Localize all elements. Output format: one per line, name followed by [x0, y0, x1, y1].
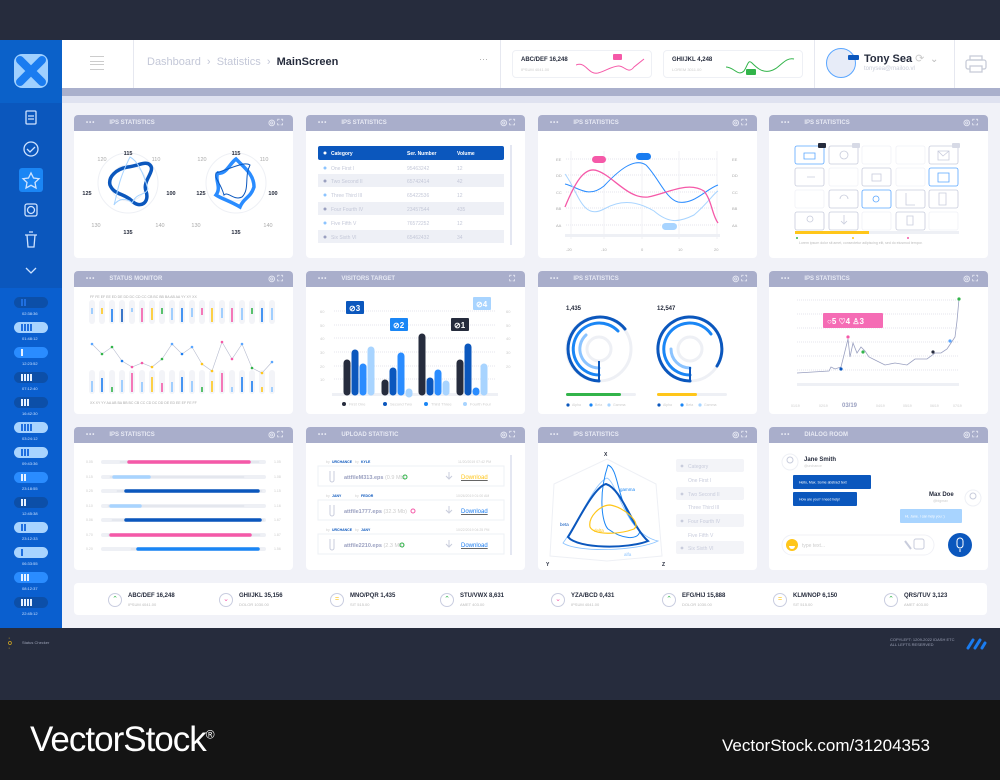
breadcrumb: Dashboard › Statistics › MainScreen [147, 56, 338, 68]
panel: triangle radar: delta [594, 528, 604, 533]
ticker bar [74, 583, 987, 615]
footer [0, 628, 1000, 700]
panel: radar charts: 140 [263, 223, 273, 229]
ticker bar: SIT 515.00 [793, 602, 812, 607]
panel: visitors target: First One [349, 402, 366, 406]
panel: category table: 12 [457, 193, 463, 199]
panel: horizontal bars [74, 427, 293, 570]
header bar: ··· [479, 54, 488, 64]
panel: dialog room: How are you? I need help! [799, 498, 840, 502]
panel: category table: Ser. Number [407, 151, 437, 157]
panel: radar charts: 120 [97, 157, 107, 163]
status timers: 03:24:12 [22, 436, 38, 441]
ticker bar: IPSUM 4041.00 [128, 602, 156, 607]
panel: status monitor: ••• STATUS MONITOR [86, 276, 162, 282]
panel: icon grid: ••• IPS STATISTICS [781, 120, 850, 126]
panel: upload statistic: 10/22/2019 04:25 PM [456, 528, 490, 532]
panel: horizontal bars: 0.15 [86, 475, 93, 479]
panel: icon grid: Lorem ipsum dolor sit amet, consectetur adipiscing elit, sed do eiusmod tempor. [799, 241, 923, 245]
panel: line chart: AA [732, 223, 738, 228]
panel: visitors target: Fourth Four [470, 402, 492, 406]
panel: line chart: EE [732, 157, 738, 162]
panel: status monitor [74, 271, 293, 414]
panel: donut gauges: Alpha [663, 403, 672, 407]
panel: line chart [538, 115, 757, 258]
header bar [62, 40, 1000, 88]
panel: upload statistic: by [355, 528, 359, 532]
panel: line chart: 0 [641, 247, 644, 252]
panel: visitors target: 60 [320, 309, 325, 314]
status timers: 16:42:30 [22, 411, 38, 416]
panel: line chart: ••• IPS STATISTICS [550, 120, 619, 126]
panel: category table: 42 [457, 179, 463, 185]
panel: triangle radar [538, 427, 757, 570]
panel: status monitor: XX XY YY AA AB BA BB BC CB CC CD DC DD DE ED EE EF FE FF [90, 401, 197, 405]
panel: triangle radar: alfa [624, 552, 632, 557]
panel: radar charts: 130 [91, 223, 101, 229]
status timers: 09:43:36 [22, 461, 38, 466]
panel: horizontal bars: 1.15 [274, 489, 281, 493]
panel: horizontal bars: 1.05 [274, 460, 281, 464]
panel: upload statistic: 10/26/2019 01:00 AM [456, 494, 489, 498]
panel: radar charts: ◎ ⛶ [268, 118, 283, 127]
panel: triangle radar: beta [560, 522, 569, 527]
profile: tonysea@mailoo.vl [864, 66, 915, 72]
panel: visitors target: ⊘1 [454, 321, 466, 330]
panel: visitors target [306, 271, 525, 414]
panel: upload statistic: JANY [361, 528, 371, 532]
panel: visitors target: ⊘4 [476, 300, 488, 309]
panel: line chart: ◎ ⛶ [732, 118, 747, 127]
ticker bar: ⌃ [666, 596, 672, 603]
panel: triangle radar: Four Fourth IV [688, 519, 721, 525]
panel: upload statistic: by [355, 494, 359, 498]
panel: triangle radar: ••• IPS STATISTICS [550, 432, 619, 438]
panel: triangle radar: One First I [688, 478, 711, 484]
panel: category table: 95463242 [407, 166, 429, 172]
watermark band: VectorStock® [30, 720, 214, 759]
panel: category table: Category [331, 151, 353, 157]
panel: visitors target: 50 [320, 323, 325, 328]
panel: upload statistic: URCHANCE [332, 460, 353, 464]
panel: radar charts: 135 [123, 230, 133, 236]
status timers: 08:12:37 [22, 586, 38, 591]
panel: dialog room: type text... [802, 543, 825, 549]
panel: category table: Two Second II [331, 179, 363, 185]
panel: donut gauges: Gamma [704, 403, 716, 407]
panel: upload statistic: attfileM313.eps (0.9 Mb) [344, 475, 406, 481]
panel: stock line: 02/19 [819, 404, 828, 408]
panel: stock line: ◎ ⛶ [963, 274, 978, 283]
panel: stock line: 06/19 [930, 404, 939, 408]
panel: horizontal bars: ••• IPS STATISTICS [86, 432, 155, 438]
ticker bar: MNO/PQR 1,435 [350, 593, 395, 599]
panel: triangle radar: Six Sixth VI [688, 546, 714, 552]
panel: dialog room: ◎ ⛶ [963, 430, 978, 439]
panel: status monitor: FF FE EF EE ED DE DD DC CD CC CB BC BB BA AB AA YY XY XX [90, 295, 197, 299]
panel: upload statistic: Download [461, 543, 488, 549]
panel: upload statistic [306, 427, 525, 570]
panel: visitors target: 40 [320, 336, 325, 341]
panel: category table: 435 [457, 207, 466, 213]
panel: horizontal bars: 1.87 [274, 533, 281, 537]
panel: donut gauges: Beta [686, 403, 693, 407]
footer: ALL LEFTS RESERVED [890, 642, 934, 647]
ticker bar: EFG/HIJ 15,888 [682, 593, 725, 599]
panel: visitors target: 40 [506, 336, 511, 341]
panel: line chart: AA [556, 223, 562, 228]
panel: dialog room [769, 427, 988, 570]
panel: donut gauges: 12,547 [657, 306, 676, 312]
panel: upload statistic: by [326, 494, 330, 498]
ticker card ABC: IPSUM 4041.00 [521, 67, 549, 72]
panel: donut gauges: ◎ ⛶ [732, 274, 747, 283]
ticker card GHI: GHI/JKL 4,248 [672, 57, 712, 63]
panel: dialog room: @bigmax [933, 499, 948, 503]
footer: Status Checker [22, 640, 49, 645]
panel: horizontal bars: 0.10 [86, 504, 93, 508]
ticker bar: ⌃ [112, 596, 118, 603]
panel: category table: 12 [457, 221, 463, 227]
panel: radar charts: 100 [268, 191, 278, 197]
panel: horizontal bars: 1.56 [274, 547, 281, 551]
panel: donut gauges: Alpha [572, 403, 581, 407]
ticker bar: YZA/BCD 0,431 [571, 593, 614, 599]
panel: visitors target: ⊘3 [349, 304, 361, 313]
panel: visitors target: Second Two [390, 402, 413, 406]
panel: category table: Six Sixth VI [331, 235, 357, 241]
panel: visitors target: ⊘2 [393, 321, 405, 330]
panel: radar charts: 115 [124, 151, 132, 157]
ticker bar: SIT 515.00 [350, 602, 370, 607]
panel: category table: 12 [457, 166, 463, 172]
profile [826, 48, 938, 78]
panel: category table: Four Fourth IV [331, 207, 364, 213]
panel: stock line: 01/19 [791, 404, 800, 408]
panel: line chart: EE [556, 157, 562, 162]
sidebar [0, 40, 62, 628]
panel: line chart: 20 [714, 247, 719, 252]
menu icon [90, 56, 104, 70]
watermark band: VectorStock.com/31204353 [722, 736, 930, 755]
panel: donut gauges: Beta [595, 403, 602, 407]
panel: upload statistic: ••• UPLOAD STATISTIC [318, 432, 398, 438]
panel: line chart: CC [732, 190, 738, 195]
ticker bar: QRS/TUV 3,123 [904, 593, 947, 599]
panel: visitors target: ••• VISITORS TARGET [318, 276, 395, 282]
panel: line chart: BB [556, 206, 562, 211]
panel: radar charts: 115 [232, 151, 240, 157]
ticker bar: ⌄ [223, 596, 229, 603]
panel: stock line: 03/19 [842, 403, 858, 409]
panel: category table [306, 115, 525, 258]
panel: horizontal bars: ◎ ⛶ [268, 430, 283, 439]
panel: category table: 65422536 [407, 193, 429, 199]
panel: upload statistic: Download [461, 509, 488, 515]
ticker bar: DOLOR 1030.00 [682, 602, 712, 607]
panel: category table: Three Third III [331, 193, 362, 199]
panel: triangle radar: gamma [620, 487, 636, 492]
content background [62, 88, 1000, 96]
top dark band [0, 0, 1000, 40]
panel: upload statistic: URCHANCE [332, 528, 353, 532]
panel: upload statistic: KYLE [361, 460, 371, 464]
ticker bar: KLM/NOP 6,150 [793, 593, 837, 599]
panel: donut gauges [538, 271, 757, 414]
profile: Tony Sea ⟳ [864, 53, 924, 65]
panel: dialog room: @urchance [804, 464, 822, 468]
panel: radar charts: 125 [82, 191, 92, 197]
panel: dialog room: ••• DIALOG ROOM [781, 432, 848, 438]
panel: radar charts: 135 [231, 230, 241, 236]
panel: stock line: 05/19 [903, 404, 912, 408]
panel: triangle radar: Category [688, 464, 709, 470]
panel: radar charts: 130 [191, 223, 201, 229]
ticker bar: = [778, 596, 782, 603]
ticker bar: ⌃ [444, 596, 450, 603]
ticker bar: GHI/JKL 35,156 [239, 593, 283, 599]
logo [0, 40, 62, 103]
panel: visitors target: 50 [506, 323, 511, 328]
panel: upload statistic: FEDOR [361, 494, 374, 498]
panel: visitors target: 60 [506, 309, 511, 314]
panel: status monitor: ◎ ⛶ [268, 274, 283, 283]
panel: triangle radar: X [604, 452, 608, 458]
profile: ⌄ [930, 54, 938, 65]
panel: icon grid [769, 115, 988, 258]
panel: icon grid: ◎ ⛶ [963, 118, 978, 127]
panel: visitors target: 30 [320, 350, 325, 355]
status timers: 12:45:38 [22, 511, 38, 516]
panel: donut gauges: ••• IPS STATISTICS [550, 276, 619, 282]
panel: horizontal bars: 0.25 [86, 489, 93, 493]
ticker card GHI [663, 50, 803, 78]
panel: radar charts: 120 [197, 157, 207, 163]
panel: triangle radar: Two Second II [688, 492, 720, 498]
panel: dialog room: Hi, Jane. I can help you :) [905, 514, 945, 518]
ticker bar: STU/VWX 8,631 [460, 593, 504, 599]
panel: category table: Five Fifth V [331, 221, 357, 227]
ticker bar: ⌃ [888, 596, 894, 603]
panel: category table: 76572252 [407, 221, 429, 227]
panel: line chart: DD [732, 173, 738, 178]
panel: horizontal bars: 0.20 [86, 547, 93, 551]
panel: visitors target: Third Three [431, 402, 452, 406]
panel: stock line: 07/19 [953, 404, 962, 408]
status timers: 07:12:40 [22, 386, 38, 391]
panel: stock line: ○5 ♡4 ♙3 [827, 317, 865, 326]
panel: triangle radar: Y [546, 562, 550, 568]
panel: stock line: ••• IPS STATISTICS [781, 276, 850, 282]
panel: line chart: DD [556, 173, 562, 178]
panel: dialog room: Hello, Max. Some abstract text [799, 480, 847, 484]
panel: horizontal bars: 1.67 [274, 518, 281, 522]
panel: category table: 23457544 [407, 207, 429, 213]
nav icons [0, 103, 62, 288]
panel: radar charts [74, 115, 293, 258]
panel: upload statistic: 11/20/2019 07:42 PM [458, 460, 491, 464]
panel: line chart: CC [556, 190, 562, 195]
panel: category table: One First I [331, 166, 354, 172]
panel: radar charts: 110 [260, 157, 268, 163]
panel: upload statistic: ◎ ⛶ [500, 430, 515, 439]
ticker bar: AMET 403.00 [460, 602, 484, 607]
panel: stock line: 04/19 [876, 404, 885, 408]
ticker card ABC [512, 50, 652, 78]
panel: category table: Volume [457, 151, 475, 157]
panel: visitors target: 20 [506, 364, 511, 369]
panel: radar charts: ••• IPS STATISTICS [86, 120, 155, 126]
status timers: 23:12:33 [22, 536, 38, 541]
footer: · [8, 645, 10, 652]
ticker bar: = [335, 596, 339, 603]
panel: horizontal bars: 0.70 [86, 533, 93, 537]
panel: upload statistic: attfile1777.eps (32.3 Mb) [344, 509, 407, 515]
status timers: 23:18:55 [22, 486, 38, 491]
footer: o [8, 640, 12, 647]
panel: category table: 65742414 [407, 179, 429, 185]
status timers: 01:48:12 [22, 336, 38, 341]
panel: category table: ◎ ⛶ [500, 118, 515, 127]
panel: dialog room: Jane Smith [804, 457, 836, 463]
ticker bar: AMET 403.00 [904, 602, 928, 607]
panel: triangle radar: Five Fifth V [688, 533, 714, 539]
panel: visitors target: 20 [320, 364, 325, 369]
status timers: 02:38:36 [22, 311, 38, 316]
panel: triangle radar: Three Third III [688, 505, 719, 511]
ticker card GHI: LOREM 3011.00 [672, 67, 702, 72]
panel: upload statistic: by [326, 528, 330, 532]
watermark band [0, 700, 1000, 780]
panel: horizontal bars: 0.05 [86, 460, 93, 464]
panel: horizontal bars: 1.16 [274, 504, 281, 508]
panel: line chart: BB [732, 206, 738, 211]
panel: upload statistic: Download [461, 475, 488, 481]
panel: line chart: -20 [566, 247, 573, 252]
panel: triangle radar: ◎ ⛶ [732, 430, 747, 439]
panel: visitors target: ⛶ [509, 274, 515, 283]
printer icon [965, 55, 987, 73]
panel: line chart: -10 [601, 247, 608, 252]
panel: visitors target: 30 [506, 350, 511, 355]
panel: upload statistic: by [326, 460, 330, 464]
panel: radar charts: 125 [196, 191, 206, 197]
ticker bar: IPSUM 4041.00 [571, 602, 599, 607]
panel: triangle radar: Z [662, 562, 665, 568]
panel: radar charts: 110 [152, 157, 160, 163]
status timers: 12:23:52 [22, 361, 38, 366]
panel: upload statistic: JANY [332, 494, 342, 498]
panel: donut gauges: 1,435 [566, 306, 582, 312]
status timers [14, 297, 48, 616]
footer: · [8, 635, 10, 642]
ticker card ABC: ABC/DEF 16,248 [521, 57, 568, 63]
ticker bar: ⌄ [555, 596, 561, 603]
ticker bar: ABC/DEF 16,248 [128, 593, 175, 599]
panel: category table: 34 [457, 235, 463, 241]
panel: stock line [769, 271, 988, 414]
footer: COPYLEFT: 1209-2022 IDASH ETC [890, 637, 954, 642]
panel: line chart: 10 [678, 247, 683, 252]
panel: upload statistic: by [355, 460, 359, 464]
panel: category table: ••• IPS STATISTICS [318, 120, 387, 126]
panel: category table: 65462432 [407, 235, 429, 241]
panel: visitors target: 10 [320, 377, 325, 382]
panel: horizontal bars: 1.08 [274, 475, 281, 479]
panel: radar charts: 140 [155, 223, 165, 229]
panel: upload statistic: attfile2210.eps (2.3 Mb) [344, 543, 404, 549]
status timers: 06:33:55 [22, 561, 38, 566]
panel: radar charts: 100 [166, 191, 176, 197]
panel: donut gauges: Gamma [613, 403, 626, 407]
panel: dialog room: Max Doe [929, 492, 954, 498]
status timers: 22:45:12 [22, 611, 38, 616]
panel: horizontal bars: 0.06 [86, 518, 93, 522]
ticker bar: DOLOR 1030.00 [239, 602, 269, 607]
